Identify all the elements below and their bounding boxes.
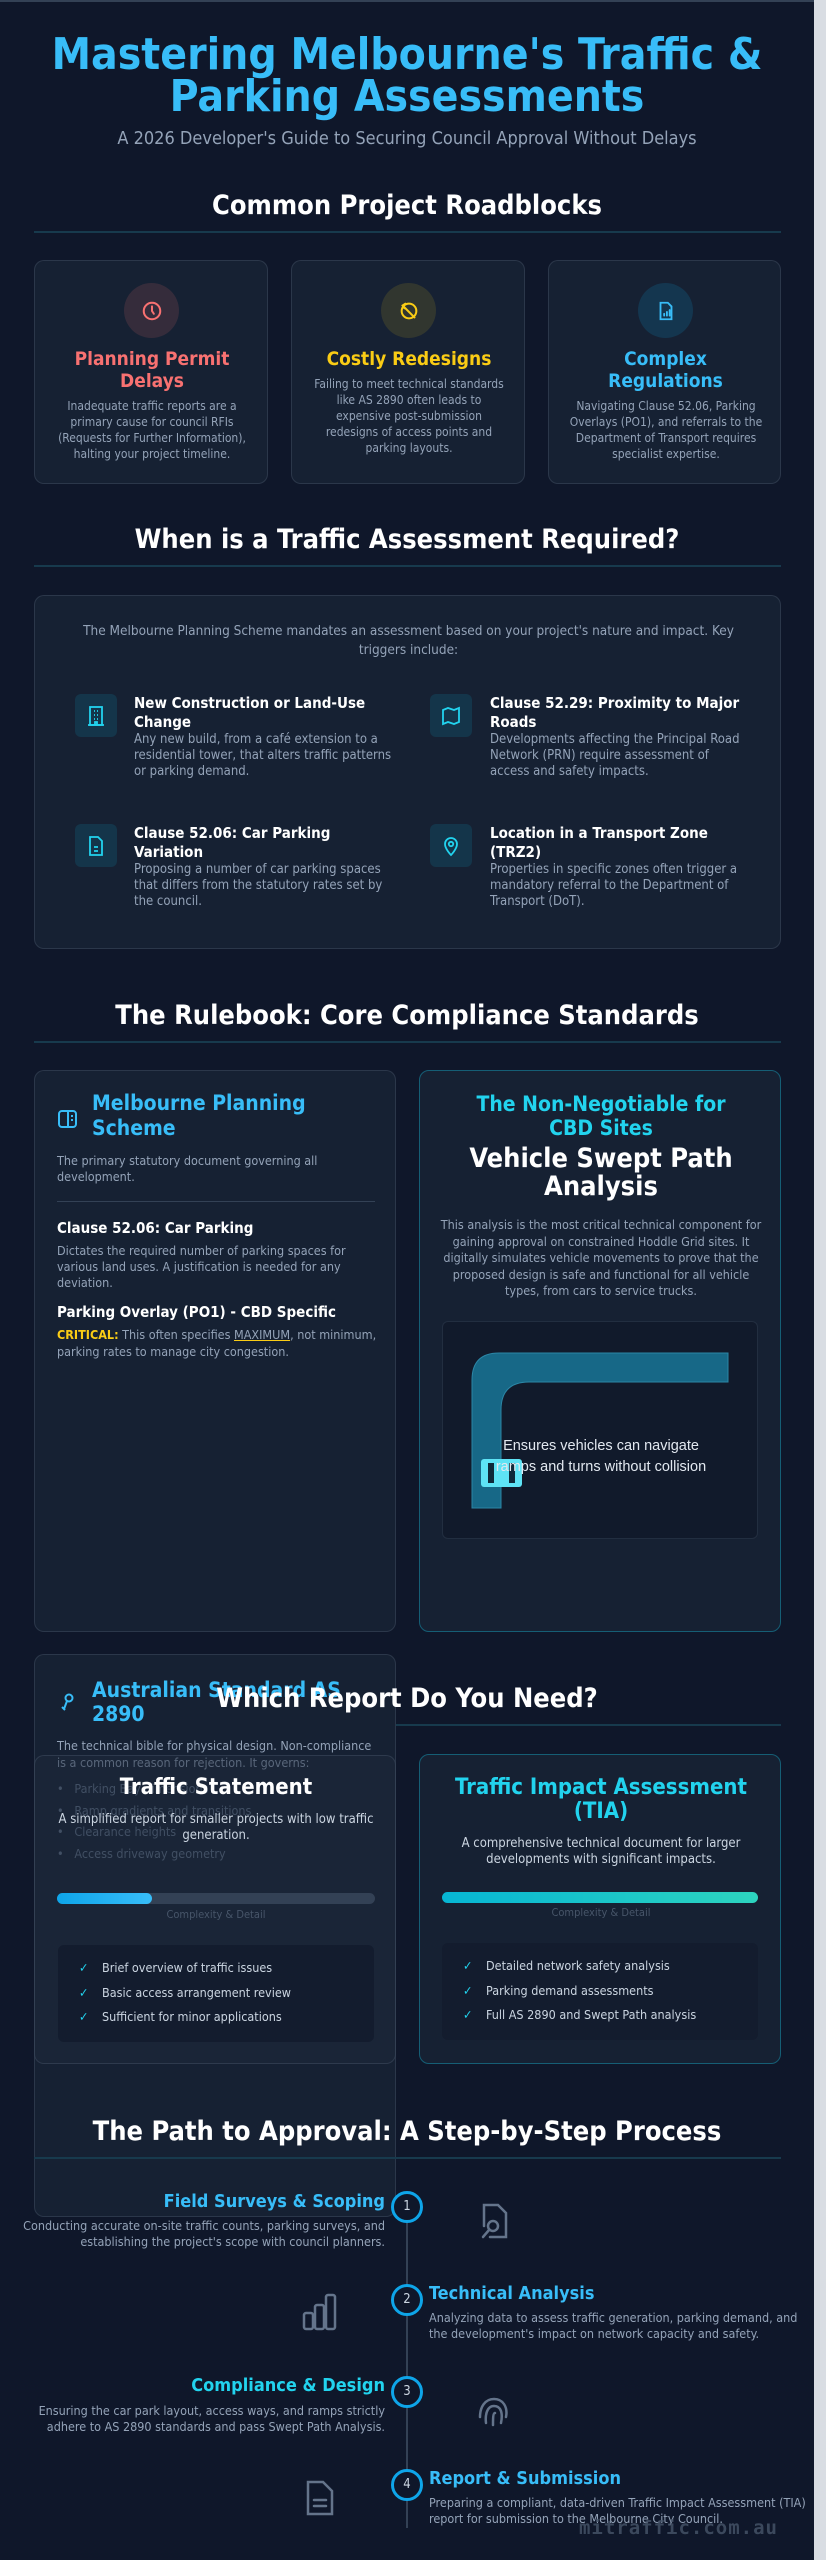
panel: Melbourne Planning Scheme: Dictates the required number of parking spaces for various land uses. A justification is needed for any deviation. <box>57 1243 346 1290</box>
checklist: Brief overview of traffic issues <box>102 1960 272 1975</box>
bullet list: • Clearance heights <box>57 1824 176 1839</box>
trigger: clause 52.06: Proposing a number of car parking spaces that differs from the statutory rates set by the council. <box>134 862 382 909</box>
panel: roadblock complex regulations <box>548 260 781 484</box>
step 4: 4 <box>403 2477 411 2492</box>
diagram: swept path: ramps and turns without collision <box>496 1459 706 1475</box>
card text: A simplified report for smaller projects with low traffic generation. <box>58 1812 374 1843</box>
card title: Australian Standard AS <box>92 1678 341 1702</box>
icon: fingerprint <box>478 2398 508 2426</box>
panel: Vehicle Swept Path Analysis <box>419 1070 781 1632</box>
panel: Traffic Statement <box>34 1755 396 2064</box>
trigger: new construction: Any new build, from a café extension to a residential tower, that alters traffic patterns or parking demand. <box>134 732 391 779</box>
icon: location pin <box>430 824 472 867</box>
card text: A comprehensive technical document for larger developments with significant impacts. <box>462 1836 740 1867</box>
card title: Regulations <box>608 370 723 392</box>
icon: clock <box>124 283 179 338</box>
title: Parking Assessments <box>170 71 644 122</box>
bullet list: • Access driveway geometry <box>57 1846 226 1861</box>
checklist: Parking demand assessments <box>486 1982 653 1998</box>
title <box>52 29 762 122</box>
card title: Vehicle Swept Path <box>469 1143 733 1174</box>
trigger: clause 52.06: Clause 52.06: Car Parking Variation <box>134 824 330 861</box>
icon: file search <box>482 2204 508 2238</box>
card text: The technical bible for physical design. Non-compliance is a common reason for rejection. It governs: <box>57 1738 371 1770</box>
trigger: clause 52.29: Developments affecting the Principal Road Network (PRN) require assessment of access and safety impacts. <box>490 732 740 779</box>
complexity bar <box>57 1893 375 1904</box>
step 1: Field Surveys & Scoping <box>164 2191 385 2212</box>
step 3: Compliance & Design <box>191 2375 385 2396</box>
card title <box>92 1678 341 1726</box>
panel: Traffic Impact Assessment <box>419 1754 781 2064</box>
panel: Traffic Impact Assessment: Complexity & Detail <box>551 1906 651 1919</box>
panel: roadblock planning permit delays <box>34 260 268 484</box>
checklist: Sufficient for minor applications <box>102 2009 282 2024</box>
card title: 2890 <box>92 1702 145 1726</box>
bullet list <box>57 1781 251 1861</box>
card title: Analysis <box>544 1171 658 1202</box>
trigger: clause 52.06 <box>75 824 382 909</box>
card title: Melbourne Planning <box>92 1091 306 1115</box>
card title <box>92 1091 306 1140</box>
trigger: clause 52.29 <box>430 694 740 779</box>
heading: The Path to Approval: The Path to Approval: A Step-by-Step Process <box>93 2116 721 2147</box>
step 3: 3 <box>403 2384 411 2399</box>
trigger: new construction <box>75 694 391 779</box>
icon: book <box>58 1110 77 1128</box>
step 1 <box>23 2191 508 2249</box>
timeline <box>23 2191 806 2528</box>
card title <box>75 348 230 392</box>
step 2: Analyzing data to assess traffic generation, parking demand, and the development's impact on network capacity and safety. <box>429 2310 797 2341</box>
checklist: Full AS 2890 and Swept Path analysis <box>486 2007 696 2022</box>
card kicker: CBD Sites <box>549 1116 653 1140</box>
subheading: Clause 52.06: Clause 52.06: Car Parking <box>57 1219 253 1237</box>
diagram: swept path <box>442 1321 758 1539</box>
step 3 <box>39 2375 508 2434</box>
step 3: Ensuring the car park layout, access ways, and ramps strictly adhere to AS 2890 standards and pass Swept Path Analysis. <box>39 2403 385 2434</box>
card title: (TIA) <box>574 1799 628 1824</box>
step 1: 1 <box>403 2199 411 2214</box>
icon: redesign <box>381 283 436 338</box>
card title: Delays <box>120 370 184 392</box>
step 2: 2 <box>403 2292 411 2307</box>
step 4: Report & Submission <box>429 2468 621 2489</box>
panel: triggers <box>34 595 781 949</box>
icon: tool <box>61 1694 74 1711</box>
step 4: Preparing a compliant, data-driven Traffic Impact Assessment (TIA) report for submission to the Melbourne City Council. <box>429 2495 806 2526</box>
subtitle: A 2026 Developer's Guide to Securing Council Approval Without Delays <box>117 128 697 149</box>
card title <box>608 348 723 392</box>
icon: bar chart <box>302 2294 336 2330</box>
card title: Traffic Statement <box>120 1775 312 1800</box>
diagram: swept path: Ensures vehicles can navigate <box>503 1438 699 1454</box>
card kicker: The Non-Negotiable for <box>476 1092 726 1116</box>
panel: Traffic Statement: Complexity & Detail <box>166 1908 266 1921</box>
card title <box>455 1775 747 1824</box>
card title <box>469 1143 733 1202</box>
heading: Common Project Roadblocks: Common Project Roadblocks <box>212 190 602 221</box>
card title: Planning Permit <box>75 348 229 370</box>
card title: Costly Redesigns <box>327 348 491 370</box>
card text: This analysis is the most critical technical component for gaining approval on constrained Hoddle Grid sites. It digitally simulates vehicle movements to prove that the proposed design is safe and functional for all vehicle types, from cars to service trucks. <box>441 1217 761 1298</box>
trigger: transport zone <box>430 824 737 909</box>
card text: The primary statutory document governing all development. <box>57 1153 317 1184</box>
step 4 <box>306 2468 806 2526</box>
trigger: clause 52.29: Clause 52.29: Proximity to Major Roads <box>490 694 739 731</box>
icon: map <box>430 694 472 737</box>
subheading: Parking Overlay: Parking Overlay (PO1) - CBD Specific <box>57 1303 336 1321</box>
icon: document chart <box>638 283 693 338</box>
trigger: transport zone: Properties in specific zones often trigger a mandatory referral to the Department of Transport (DoT). <box>490 862 737 909</box>
checklist: Detailed network safety analysis <box>486 1958 670 1973</box>
step 2: Technical Analysis <box>429 2283 594 2304</box>
bullet list: • Ramp gradients and transitions <box>57 1803 251 1818</box>
panel: Australian Standard AS 2890 <box>34 1654 396 2217</box>
card title: Traffic Impact Assessment <box>455 1775 747 1800</box>
panel: Melbourne Planning Scheme: CRITICAL: This often specifies MAXIMUM, not minimum, parking rates to manage city congestion. <box>57 1327 376 1358</box>
heading: When is a Traffic Assessment Required: When is a Traffic Assessment Required? <box>135 524 679 555</box>
step 2 <box>302 2283 797 2341</box>
checklist: Basic access arrangement review <box>102 1984 291 2000</box>
icon: document <box>75 824 117 867</box>
checklist <box>442 1943 758 2040</box>
heading: The Rulebook: The Rulebook: Core Compliance Standards <box>115 1000 699 1031</box>
icon: building <box>75 694 117 737</box>
step 1: Conducting accurate on-site traffic counts, parking surveys, and establishing the project's scope with council planners. <box>23 2218 385 2249</box>
card title: Complex <box>624 348 707 370</box>
title: Mastering Melbourne's Traffic & <box>52 29 762 80</box>
card title: Scheme <box>92 1116 176 1140</box>
panel: Melbourne Planning Scheme <box>34 1070 396 1632</box>
card text: Inadequate traffic reports are a primary cause for council RFIs (Requests for Further Information), halting your project timeline. <box>58 399 246 461</box>
heading: Which Report Do You Need: Which Report Do You Need? <box>216 1683 598 1714</box>
trigger: new construction: New Construction or Land-Use Change <box>134 694 365 731</box>
card text: Failing to meet technical standards like AS 2890 often leads to expensive post-submission redesigns of access points and parking layouts. <box>314 377 504 455</box>
complexity bar <box>442 1892 758 1903</box>
trigger: transport zone: Location in a Transport Zone (TRZ2) <box>490 824 708 861</box>
checklist <box>58 1945 374 2042</box>
card text: Navigating Clause 52.06, Parking Overlays (PO1), and referrals to the Department of Transport requires specialist expertise. <box>570 399 762 461</box>
card kicker <box>476 1092 726 1140</box>
intro text: The Melbourne Planning Scheme mandates an assessment based on your project's nature and impact. Key triggers include: <box>83 623 734 658</box>
panel: roadblock costly redesigns <box>291 260 525 484</box>
bullet list: • Parking Bay dimensions <box>57 1781 209 1796</box>
watermark: mitraffic.com.au <box>579 2517 778 2539</box>
icon: document <box>306 2480 334 2516</box>
